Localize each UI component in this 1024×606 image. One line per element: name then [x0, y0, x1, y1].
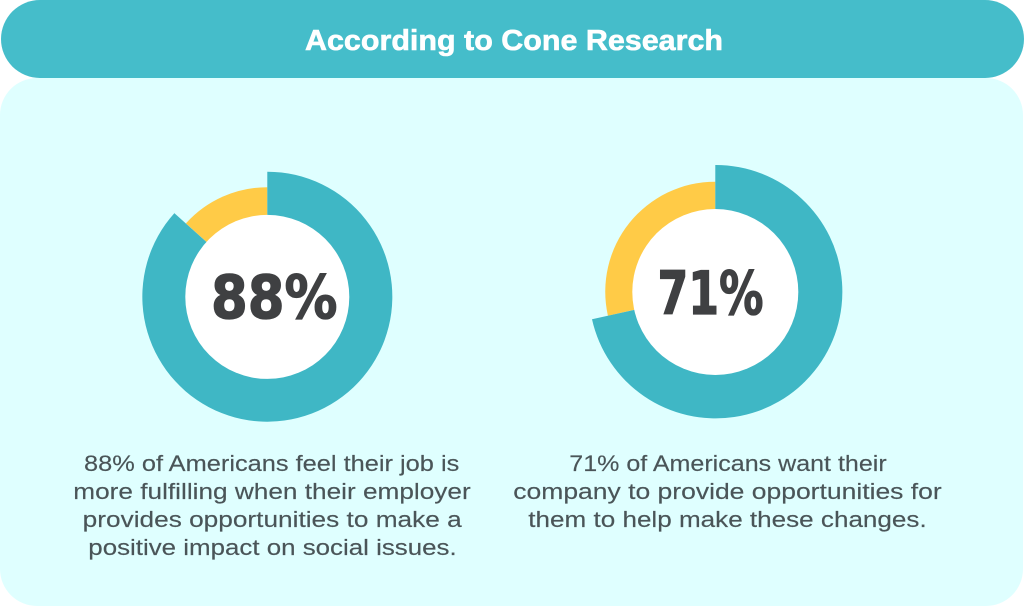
text block: 88% description: 88% of Americans feel their job is: [84, 451, 459, 476]
title: According to Cone Research: [305, 25, 723, 57]
text block: 71% description: company to provide opportunities for: [513, 479, 942, 504]
text block: 88% description: positive impact on social issues.: [88, 535, 457, 560]
header banner: [1, 0, 1024, 78]
text block: 88% description: more fulfilling when their employer: [73, 479, 471, 504]
text block: 71% description: them to help make these changes.: [528, 507, 927, 532]
value: 71%: 71%: [658, 259, 764, 329]
donut chart: 71%: [592, 165, 842, 418]
text block: 88% description: [73, 451, 471, 560]
text block: 71% description: [513, 451, 942, 532]
value: 88%: 88%: [211, 263, 338, 333]
text block: 71% description: 71% of Americans want their: [569, 451, 887, 476]
text block: 88% description: provides opportunities to make a: [83, 507, 462, 532]
donut chart: 88%: [142, 172, 392, 422]
